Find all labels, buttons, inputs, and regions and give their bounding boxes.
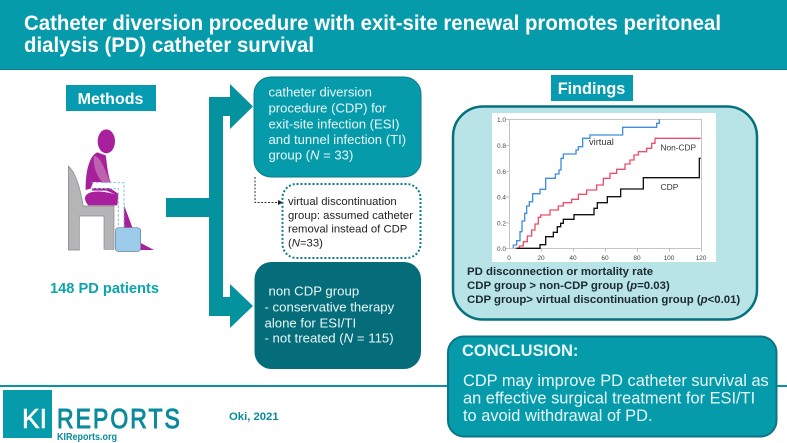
findings text: PD disconnection or mortality rate [467,266,653,278]
panel: conclusion: an effective surgical treatment for ESI/TI [463,390,755,408]
panel: virtual discontinuation group [282,184,420,258]
panel: non CDP group: - not treated (N = 115) [264,330,394,345]
logo: KI Reports: REPORTS [57,404,182,435]
findings text: CDP group> virtual discontinuation group (p<0.01) [467,294,740,306]
chart: cumulative rate curves: 0.8 [497,143,506,150]
panel: CDP group: catheter diversion [268,85,372,100]
panel: non CDP group [254,262,421,369]
logo: KI Reports: KI [22,403,47,434]
panel: non CDP group: alone for ESI/TI [264,315,356,330]
panel: conclusion: CDP may improve PD catheter survival as [463,372,769,390]
chart: cumulative rate curves: virtual [589,137,614,147]
citation: Oki, 2021 [229,411,279,423]
arrow: dashed connector to virtual group [255,177,283,205]
title banner: dialysis (PD) catheter survival [24,34,314,57]
methods label [66,85,156,111]
icon: seated patient on chair [68,129,154,252]
patient count: 148 PD patients [50,281,159,297]
chart: cumulative rate curves: 0.6 [497,169,506,176]
logo: KI Reports: KIReports.org [57,432,117,443]
findings label: Findings [558,80,625,98]
arrow: branching to study groups [166,84,253,328]
title banner [0,0,787,70]
panel: conclusion: to avoid withdrawal of PD. [463,407,652,425]
chart: cumulative rate curves: Non-CDP [660,142,696,152]
chart: cumulative rate curves: 20 [537,255,545,262]
chart: cumulative rate curves: 0.0 [497,246,506,253]
chart: cumulative rate curves: 100 [664,255,675,262]
chart: cumulative rate curves: 60 [601,255,609,262]
methods label: Methods [78,91,143,108]
panel: virtual discontinuation group: group: assumed catheter [288,210,413,222]
chart: cumulative rate curves [492,113,716,262]
title banner: Catheter diversion procedure with exit-site renewal promotes peritoneal [24,12,721,35]
panel: virtual discontinuation group: removal instead of CDP [288,224,407,236]
chart: cumulative rate curves: CDP [660,182,679,192]
panel: non CDP group: - conservative therapy [264,300,395,315]
panel: CDP group: procedure (CDP) for [268,101,387,116]
footer divider line [0,385,787,387]
chart: cumulative rate curves: 0.2 [497,220,506,228]
logo: KI Reports [3,390,182,443]
chart: cumulative rate curves: 1.0 [497,117,506,124]
findings label [551,75,633,101]
chart: cumulative rate curves: 40 [569,255,577,262]
panel: non CDP group: non CDP group [268,284,359,299]
panel: virtual discontinuation group: virtual discontinuation [288,196,397,208]
panel: virtual discontinuation group: (N=33) [288,238,323,250]
chart: cumulative rate curves: 120 [696,255,707,262]
panel: CDP group: and tunnel infection (TI) [268,132,406,147]
panel: conclusion: CONCLUSION: [462,342,578,360]
chart: cumulative rate curves: 0 [507,255,511,262]
chart: cumulative rate curves: 80 [633,255,641,262]
panel: CDP group: group (N = 33) [268,147,353,162]
panel: conclusion [448,336,776,436]
findings text: CDP group > non-CDP group (p=0.03) [467,280,670,292]
chart: cumulative rate curves: 0.4 [497,194,506,202]
panel: CDP group [254,77,421,177]
panel: CDP group: exit-site infection (ESI) [268,116,399,131]
panel: findings [453,106,757,320]
